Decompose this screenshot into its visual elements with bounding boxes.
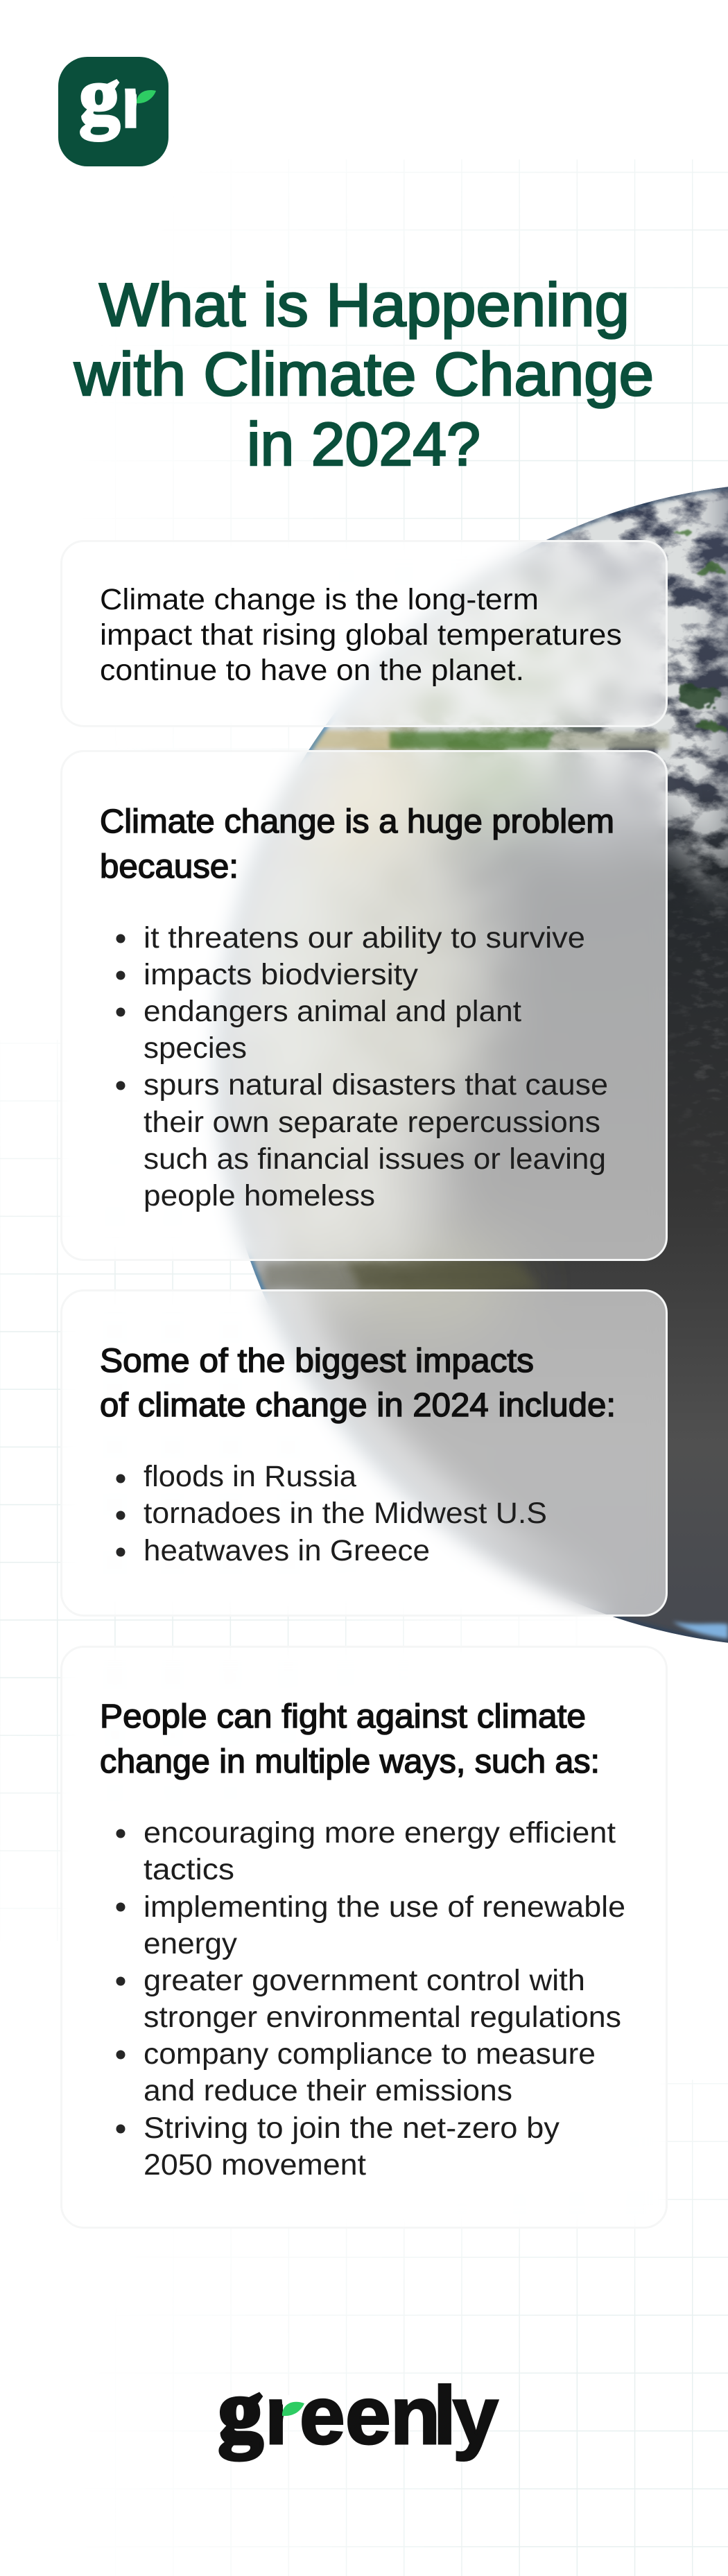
- heading: People can fight against climate: [100, 1698, 586, 1735]
- bullet list: floods in Russia: [144, 1460, 356, 1493]
- logo: app icon: r: [121, 62, 149, 143]
- bullet list: and reduce their emissions: [144, 2074, 512, 2107]
- globe surface: [208, 478, 728, 1657]
- title: [73, 270, 654, 478]
- heading: [100, 1698, 600, 1780]
- panel: biggest impacts: [60, 1289, 668, 1617]
- heading: [100, 803, 614, 885]
- bullet list: tactics: [144, 1853, 234, 1886]
- bullet list: encouraging more energy efficient: [144, 1816, 616, 1850]
- heading: [100, 1343, 616, 1424]
- text block: definition: continue to have on the planet.: [100, 654, 524, 687]
- heading: of climate change in 2024 include:: [100, 1387, 616, 1424]
- bullet list: company compliance to measure: [144, 2037, 596, 2071]
- heading: Climate change is a huge problem: [100, 803, 614, 840]
- bullet list: spurs natural disasters that cause: [144, 1068, 608, 1102]
- bullet list: Striving to join the net-zero by: [144, 2112, 560, 2145]
- bullet list: their own separate repercussions: [144, 1106, 600, 1139]
- bullet list: stronger environmental regulations: [144, 2001, 621, 2034]
- text block: definition: impact that rising global temperatures: [100, 618, 622, 652]
- bullet list: [116, 921, 608, 1212]
- cloud cover: [255, 487, 728, 1267]
- bullet list: heatwaves in Greece: [144, 1534, 430, 1567]
- heading: Some of the biggest impacts: [100, 1343, 534, 1380]
- dark-side streaks: [668, 865, 728, 1163]
- soft limb glow: [216, 532, 589, 1590]
- panel: definition: [60, 540, 668, 727]
- text block: definition: [100, 583, 622, 687]
- bullet list: greater government control with: [144, 1964, 585, 1997]
- bullet list: species: [144, 1032, 247, 1065]
- panel: ways to fight: [60, 1646, 668, 2229]
- green patches: [673, 530, 724, 730]
- panel: why it is a problem: [60, 750, 668, 1261]
- bullet list: tornadoes in the Midwest U.S: [144, 1497, 547, 1530]
- bullet list: endangers animal and plant: [144, 995, 521, 1028]
- bullet list: [116, 1460, 547, 1567]
- atmosphere rim: [217, 483, 728, 1646]
- title: What is Happening: [99, 270, 630, 339]
- title: in 2024?: [247, 410, 480, 478]
- earth globe: [208, 487, 728, 1643]
- bullet list: such as financial issues or leaving: [144, 1142, 606, 1176]
- heading: change in multiple ways, such as:: [100, 1743, 600, 1780]
- logo: app icon: [58, 57, 168, 166]
- text block: definition: Climate change is the long-term: [100, 583, 539, 616]
- bullet list: 2050 movement: [144, 2148, 366, 2182]
- heading: because:: [100, 848, 239, 885]
- bullet list: energy: [144, 1927, 238, 1960]
- bullet list: [116, 1816, 625, 2182]
- bullet list: impacts biodviersity: [144, 958, 419, 991]
- title: with Climate Change: [73, 340, 654, 408]
- bullet list: implementing the use of renewable: [144, 1890, 625, 1924]
- bullet list: it threatens our ability to survive: [144, 921, 585, 955]
- bullet list: people homeless: [144, 1179, 375, 1212]
- land strip: [263, 731, 669, 1289]
